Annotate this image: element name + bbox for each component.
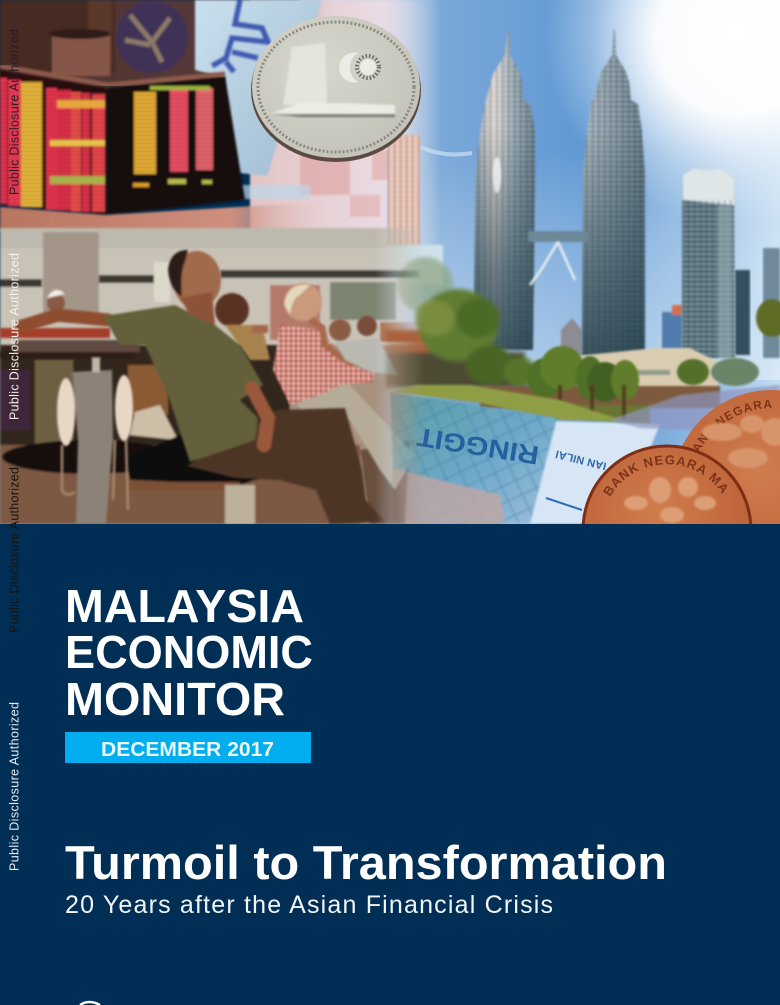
person: bald man bbox=[215, 293, 270, 360]
photo: trading hall with investors bbox=[0, 228, 440, 525]
subheading: 20 Years after the Asian Financial Crisis bbox=[65, 891, 553, 919]
note: blue ringgit note bbox=[390, 392, 557, 524]
man: hair bbox=[168, 250, 188, 297]
photo: ringgit banknotes bbox=[390, 385, 780, 524]
building: small distant block bbox=[561, 318, 582, 356]
person: left man in white cap bbox=[47, 290, 65, 312]
icon: back coin flower bbox=[702, 415, 780, 468]
heading: Turmoil to Transformation: Turmoil to Transformation bbox=[65, 836, 667, 889]
note: blue flourish bbox=[546, 498, 582, 510]
building: far right tower bbox=[763, 248, 780, 358]
icon: skybridge bbox=[528, 231, 588, 285]
icon: front coin flower bbox=[624, 477, 716, 523]
text: coin back legend: BANK NEGARA bbox=[693, 400, 772, 451]
heading line: ECONOMIC: ECONOMIC bbox=[65, 626, 313, 678]
icon: petronas tower left bbox=[473, 32, 535, 350]
photo: pink banknote background bbox=[240, 0, 440, 250]
icon: cropped logo arc bbox=[80, 1002, 100, 1005]
board: right screen bbox=[107, 76, 245, 215]
building: left pink tower bbox=[388, 135, 443, 285]
hall: floor and dark seating bbox=[0, 345, 440, 525]
coin: back copper sen bbox=[682, 390, 780, 524]
man: arm along table bbox=[22, 315, 108, 326]
table and telephone kiosk bbox=[0, 328, 140, 524]
person: main man in olive shirt bbox=[22, 250, 385, 524]
photo: light blue banknote with squiggle bbox=[195, 0, 322, 176]
stamp: disclosure text 2: Public Disclosure Authorized bbox=[8, 253, 22, 420]
lawn bbox=[390, 385, 628, 422]
man: shirt bbox=[103, 305, 263, 462]
person: two men in background bbox=[329, 316, 398, 375]
board: lower beam bbox=[0, 204, 298, 233]
photo: blue sky with sun glare bbox=[300, 0, 780, 524]
tree canopy left bbox=[385, 257, 536, 388]
note: lilac guilloche bbox=[610, 385, 780, 430]
note: pale blue note bbox=[500, 420, 660, 524]
man: forearm and hand bbox=[252, 388, 268, 445]
text: RINGGIT: RINGGIT bbox=[415, 422, 541, 471]
hall: walls bbox=[0, 228, 440, 524]
stamp: disclosure text 4: Public Disclosure Authorized bbox=[8, 702, 22, 871]
heading line: MONITOR: MONITOR bbox=[65, 673, 285, 725]
text: date: DECEMBER 2017 bbox=[101, 739, 274, 761]
man: neck bbox=[180, 292, 215, 325]
photo: buildings and skyline bbox=[388, 30, 780, 388]
man: head bbox=[173, 251, 221, 309]
building: curved office tower bbox=[682, 168, 735, 358]
icon: petronas tower right bbox=[582, 30, 645, 356]
photo: trees and park bbox=[385, 257, 780, 425]
building: blue distant tower bbox=[662, 305, 682, 350]
palm top right bbox=[756, 299, 780, 337]
stamp: disclosure text 3: Public Disclosure Authorized bbox=[8, 467, 22, 633]
photo: stock exchange ceiling bbox=[0, 0, 330, 90]
icon: crescent and star bbox=[339, 53, 379, 83]
coin: silver ringgit coin bbox=[251, 16, 421, 162]
man: trousers bbox=[187, 408, 385, 524]
heading line: MALAYSIA: MALAYSIA bbox=[65, 580, 304, 632]
building: low beige podium bbox=[577, 348, 718, 388]
palm trees row bbox=[480, 346, 759, 425]
coin: front copper sen bbox=[582, 444, 752, 524]
building: dark tower bbox=[735, 270, 750, 355]
heading: report title bbox=[65, 580, 313, 725]
text: small note lettering: IAN NILAI bbox=[554, 448, 608, 472]
text: coin front legend: BANK NEGARA MA bbox=[603, 455, 728, 496]
note: pink lower note fold bbox=[392, 468, 505, 524]
stamp: disclosure text 1: Public Disclosure Authorized bbox=[8, 29, 22, 195]
board: upper beam bbox=[0, 66, 225, 85]
person: seated man in red check shirt bbox=[273, 283, 415, 490]
date band bbox=[65, 732, 311, 763]
photo: trading boards bbox=[0, 66, 330, 232]
cover photo collage bbox=[0, 0, 780, 524]
board: left screen bbox=[0, 70, 107, 215]
icon: coin tower bbox=[272, 43, 395, 117]
